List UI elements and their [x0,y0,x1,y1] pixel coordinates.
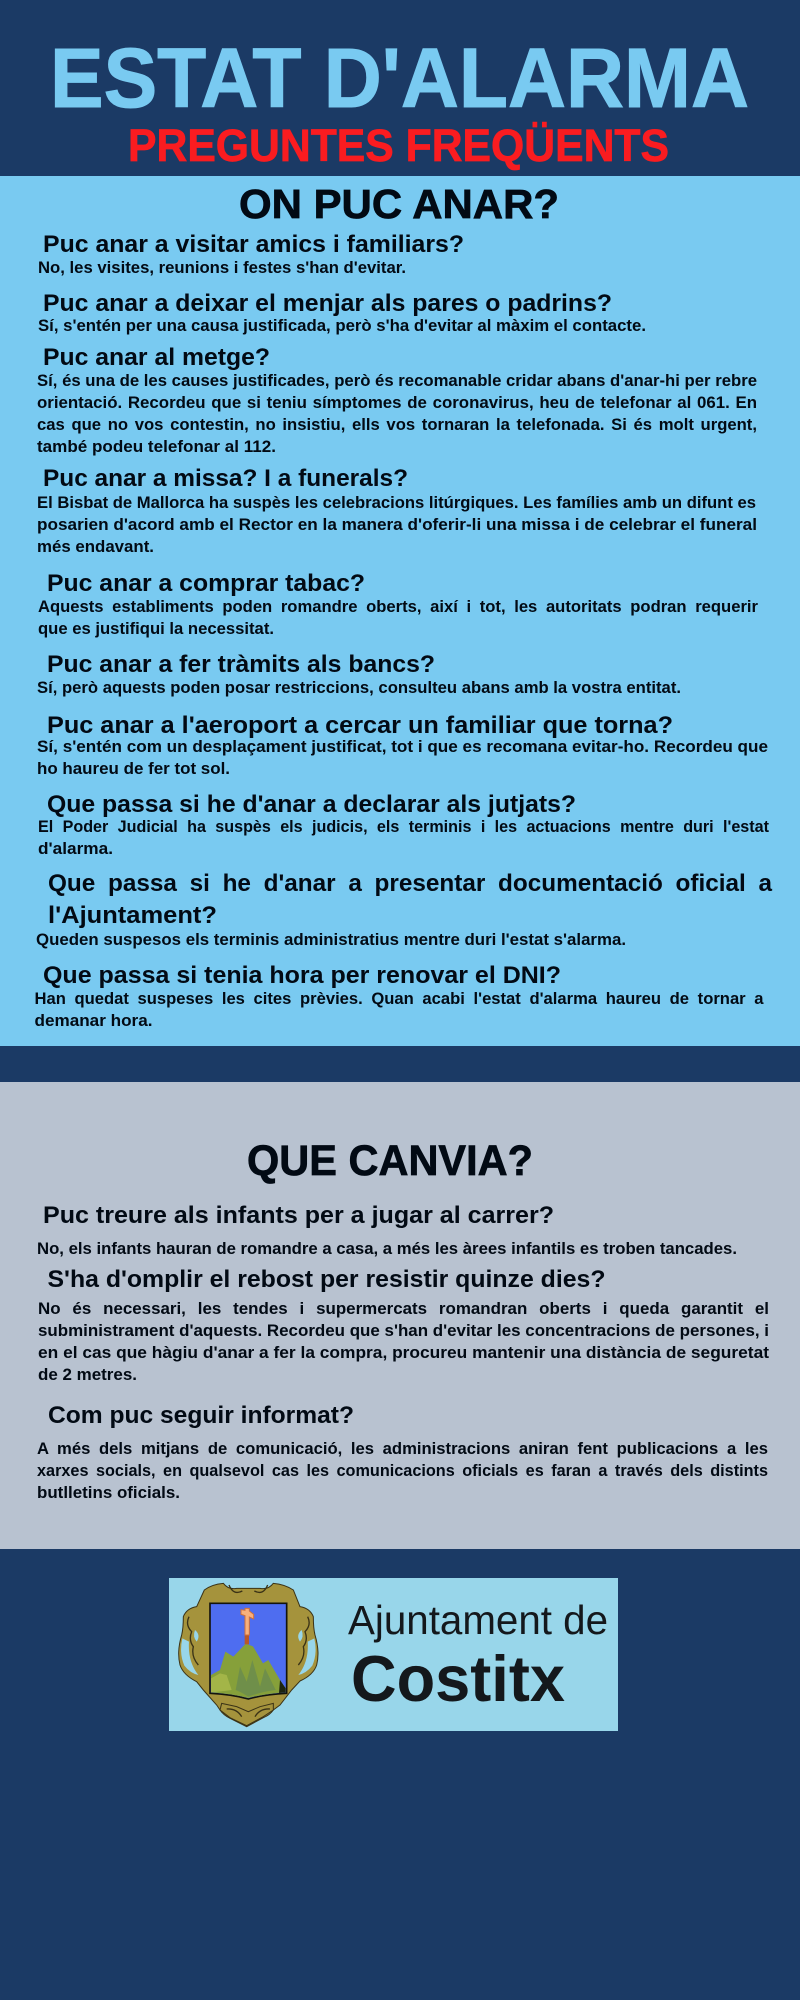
title: ESTAT D'ALARMA [50,31,749,125]
question: metge: també podeu telefonar al 112. [37,438,276,456]
icon: coat of arms [179,1583,318,1727]
question: informat [37,1402,768,1502]
question: missa i funerals: El Bisbat de Mallorca ha suspès les celebracions litúrgiques. Les famílies amb un difunt es [37,494,756,512]
question: tabac: Puc anar a comprar tabac? [47,570,365,597]
question: informat: butlletins oficials. [37,1484,180,1502]
question: dni: demanar hora. [34,1012,152,1030]
question: rebost: en el cas que hàgiu d'anar a fer la compra, procureu mantenir una distància de seguretat [38,1344,770,1362]
question: visitar amics [38,231,464,277]
question: documentacio oficial [36,870,772,949]
question: menjar als pares [38,290,646,335]
question: missa i funerals: posarien d'acord amb el Rector en la manera d'oferir-li una missa i de celebrar el funeral [37,516,757,534]
question: aeroport: Sí, s'entén com un desplaçament justificat, tot i que es recomana evitar-ho. Recordeu que [37,738,768,756]
question: informat: Com puc seguir informat? [48,1402,354,1429]
question: missa i funerals: Puc anar a missa? I a funerals? [43,465,408,492]
question: rebost: de 2 metres. [38,1366,137,1384]
question: documentacio oficial: l'Ajuntament? [48,902,217,929]
question: rebost [38,1266,770,1384]
question: metge: Sí, és una de les causes justificades, però és recomanable cridar abans d'anar-hi per rebre [37,372,757,390]
question: missa i funerals: més endavant. [37,538,154,556]
question: metge: cas que no vos contestin, no insistiu, ells vos tornaran la telefonada. Si és molt urgent, [37,416,757,434]
heading: que canvia: QUE CANVIA? [247,1137,533,1185]
subtitle: PREGUNTES FREQÜENTS [128,120,669,171]
header band [0,0,800,176]
question: jutjats [38,791,769,858]
question: jutjats: Que passa si he d'anar a declarar als jutjats? [47,791,576,818]
question: rebost: subministrament d'aquests. Recordeu que s'han d'evitar les concentracions de persones, i [38,1322,769,1340]
question: visitar amics: No, les visites, reunions i festes s'han d'evitar. [38,259,406,277]
question: dni [34,962,764,1030]
question: documentacio oficial: Que passa si he d'anar a presentar documentació oficial a [48,870,772,897]
question: metge: Puc anar al metge? [43,344,270,371]
question: metge [37,344,757,456]
question: menjar als pares: Puc anar a deixar el menjar als pares o padrins? [43,290,612,317]
question: infants [37,1202,737,1258]
panel: que canvia [0,1082,800,1549]
question: menjar als pares: Sí, s'entén per una causa justificada, però s'ha d'evitar al màxim el contacte. [38,317,646,335]
question: informat: A més dels mitjans de comunicació, les administracions aniran fent publicacions a les [37,1440,768,1458]
question: jutjats: d'alarma. [38,840,113,858]
panel: on puc anar [0,176,800,1046]
question: tabac [38,570,759,638]
question: tabac: que es justifiqui la necessitat. [38,620,274,638]
question: informat: xarxes socials, en qualsevol cas les comunicacions oficials es faran a través dels distints [37,1462,768,1480]
question: bancs [37,651,681,697]
question: aeroport [37,712,768,778]
question: dni: Han quedat suspeses les cites prèvies. Quan acabi l'estat d'alarma haureu de tornar a [34,990,764,1008]
logo: ajuntament de costitx [169,1578,618,1731]
heading: on puc anar: ON PUC ANAR? [239,181,559,227]
question: rebost: No és necessari, les tendes i supermercats romandran oberts i queda garantit el [38,1300,769,1318]
question: aeroport: Puc anar a l'aeroport a cercar un familiar que torna? [47,712,673,739]
question: jutjats: El Poder Judicial ha suspès els judicis, els terminis i les actuacions mentre duri l'estat [38,818,769,836]
question: bancs: Puc anar a fer tràmits als bancs? [47,651,435,678]
question: missa i funerals [37,465,757,556]
logo text: ajuntament de: Ajuntament de [348,1597,608,1643]
question: infants: Puc treure als infants per a jugar al carrer? [43,1202,554,1229]
question: rebost: S'ha d'omplir el rebost per resistir quinze dies? [48,1266,606,1293]
question: visitar amics: Puc anar a visitar amics i familiars? [43,231,464,258]
question: bancs: Sí, però aquests poden posar restriccions, consulteu abans amb la vostra entitat. [37,679,681,697]
question: documentacio oficial: Queden suspesos els terminis administratius mentre duri l'estat s'alarma. [36,931,626,949]
question: infants: No, els infants hauran de romandre a casa, a més les àrees infantils es troben tancades. [37,1240,737,1258]
question: metge: orientació. Recordeu que si teniu símptomes de coronavirus, heu de telefonar al 061. En [37,394,757,412]
question: tabac: Aquests establiments poden romandre oberts, així i tot, les autoritats podran requerir [38,598,759,616]
logo text: costitx: Costitx [351,1642,565,1715]
question: dni: Que passa si tenia hora per renovar el DNI? [43,962,561,989]
question: aeroport: ho haureu de fer tot sol. [37,760,230,778]
